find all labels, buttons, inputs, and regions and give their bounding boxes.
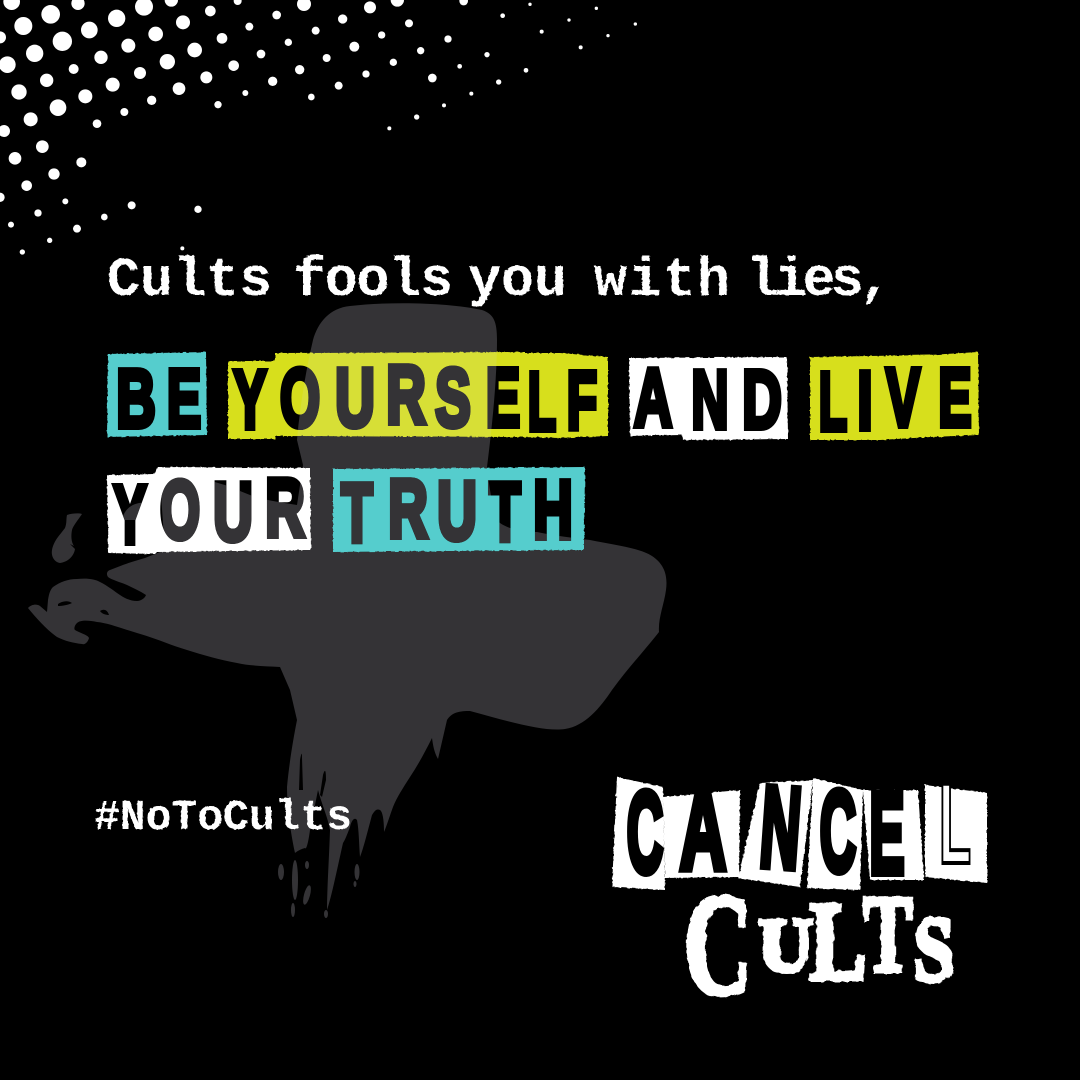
word: YOURSELF: R	[386, 347, 426, 441]
word: CULTS: L	[810, 879, 866, 1004]
word: TRUTH: U	[437, 463, 477, 557]
drip droplets	[278, 860, 360, 918]
word: YOURSELF: O	[280, 350, 320, 444]
word: AND	[634, 351, 782, 446]
word: YOUR: U	[213, 464, 253, 558]
word: YOUR: Y	[113, 468, 147, 561]
logo tiles	[612, 777, 987, 890]
word: AND: A	[634, 351, 672, 444]
word: CANCEL	[627, 759, 971, 897]
tile: LIVE	[810, 352, 979, 440]
word: BE: B	[116, 351, 156, 445]
lead line: with	[594, 249, 730, 312]
word: YOUR: O	[160, 462, 200, 556]
word: BE: E	[167, 351, 201, 445]
word: CULTS: S	[914, 899, 954, 1001]
tile: BE	[107, 352, 207, 437]
word: YOURSELF	[233, 347, 597, 449]
word: YOURSELF: E	[486, 350, 520, 444]
word: TRUTH: T	[341, 465, 373, 559]
word: YOURSELF: L	[528, 356, 556, 449]
lead line: fools	[293, 249, 453, 312]
word: CANCEL: C	[627, 768, 663, 897]
word: YOURSELF: S	[435, 351, 471, 444]
word: CANCEL: L	[939, 759, 971, 887]
shadow blob on Y	[122, 503, 148, 520]
word: TRUTH	[341, 461, 573, 559]
logo: Cancel Cults	[612, 759, 987, 1026]
word: CULTS: T	[864, 874, 912, 996]
drop near left arm	[52, 513, 82, 563]
word: TRUTH: H	[533, 462, 573, 556]
word: CULTS: U	[759, 904, 813, 988]
word: CULTS: C	[684, 864, 752, 1026]
hashtag: #NoToCults	[94, 793, 352, 842]
cross silhouette seen through the black letters	[28, 303, 666, 918]
word: AND: D	[742, 352, 782, 446]
word: TRUTH: R	[388, 461, 428, 555]
word: CANCEL: N	[756, 763, 805, 894]
word: LIVE: V	[886, 350, 920, 444]
word: LIVE	[819, 350, 972, 449]
word: LIVE: L	[819, 356, 847, 449]
word: YOURSELF: F	[567, 354, 597, 447]
word: YOUR: R	[265, 460, 305, 554]
headline tiles and letters	[107, 347, 979, 561]
lead line: Cults	[107, 249, 272, 312]
lead line: you	[468, 249, 567, 312]
tile: AND	[629, 357, 788, 440]
word: LIVE: I	[857, 353, 873, 447]
word: BE	[116, 351, 201, 445]
word: YOURSELF: Y	[233, 353, 267, 446]
word: YOURSELF: U	[335, 350, 375, 444]
lead line: lies,	[746, 249, 892, 312]
lead line	[107, 249, 892, 312]
word: CANCEL: E	[869, 769, 905, 897]
word: AND: N	[691, 352, 729, 446]
tile: YOURSELF	[228, 352, 608, 439]
word: LIVE: E	[938, 351, 972, 444]
word: YOUR	[113, 460, 305, 561]
word: CANCEL: C	[820, 767, 856, 896]
word: CULTS	[684, 864, 954, 1026]
tile: TRUTH	[333, 467, 585, 552]
tile: YOUR	[107, 467, 311, 554]
word: CANCEL: A	[680, 765, 726, 894]
word: TRUTH: T	[489, 464, 521, 558]
halftone dots	[0, 0, 637, 255]
